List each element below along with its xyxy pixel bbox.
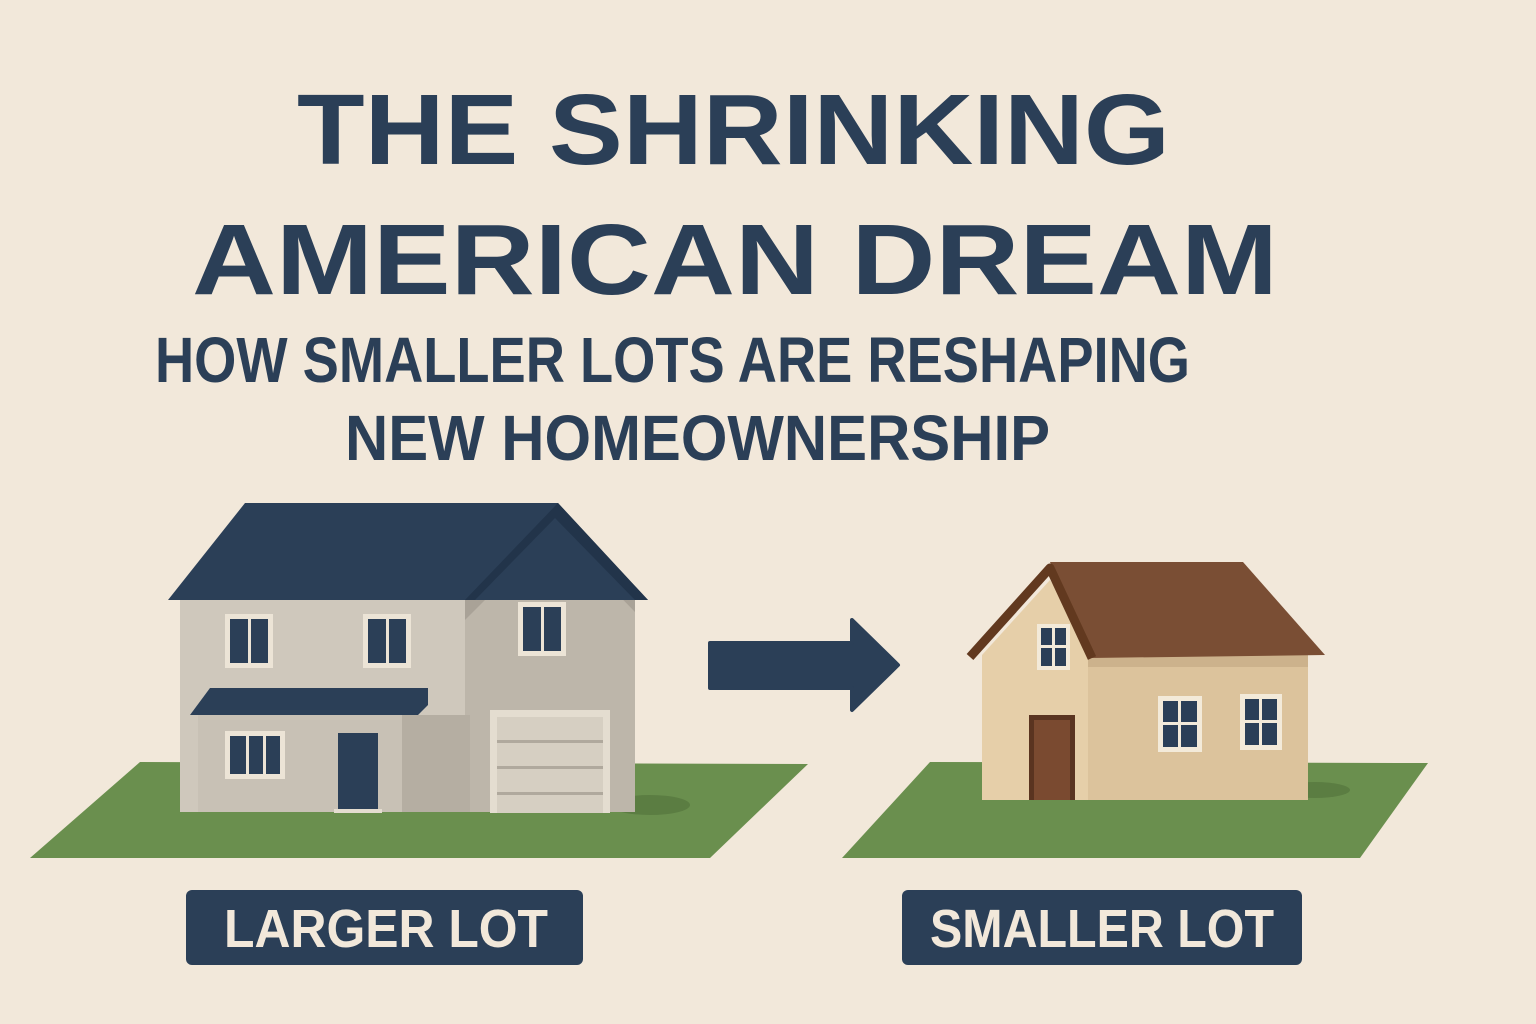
right windows xyxy=(1158,696,1202,752)
roof xyxy=(168,503,648,600)
upper windows xyxy=(225,614,273,668)
grass lot small xyxy=(842,762,1428,858)
door xyxy=(338,733,378,811)
title: THE SHRINKING xyxy=(297,74,1170,186)
subtitle: HOW SMALLER LOTS ARE RESHAPING xyxy=(155,324,1190,396)
porch xyxy=(198,715,408,812)
label: larger lot: LARGER LOT xyxy=(224,899,548,959)
gable window xyxy=(1037,624,1070,670)
house body xyxy=(982,580,1090,800)
garage xyxy=(490,710,610,813)
door xyxy=(1029,715,1075,800)
subtitle xyxy=(155,324,1190,474)
house body xyxy=(180,600,470,812)
label: smaller lot: SMALLER LOT xyxy=(930,899,1274,959)
subtitle: NEW HOMEOWNERSHIP xyxy=(345,402,1050,474)
roof xyxy=(1050,562,1325,658)
title: AMERICAN DREAM xyxy=(192,204,1278,316)
title xyxy=(192,74,1278,316)
larger house on large lot xyxy=(30,503,808,858)
arrow xyxy=(710,620,898,710)
grass lot large xyxy=(30,762,808,858)
smaller house on small lot xyxy=(842,562,1428,858)
